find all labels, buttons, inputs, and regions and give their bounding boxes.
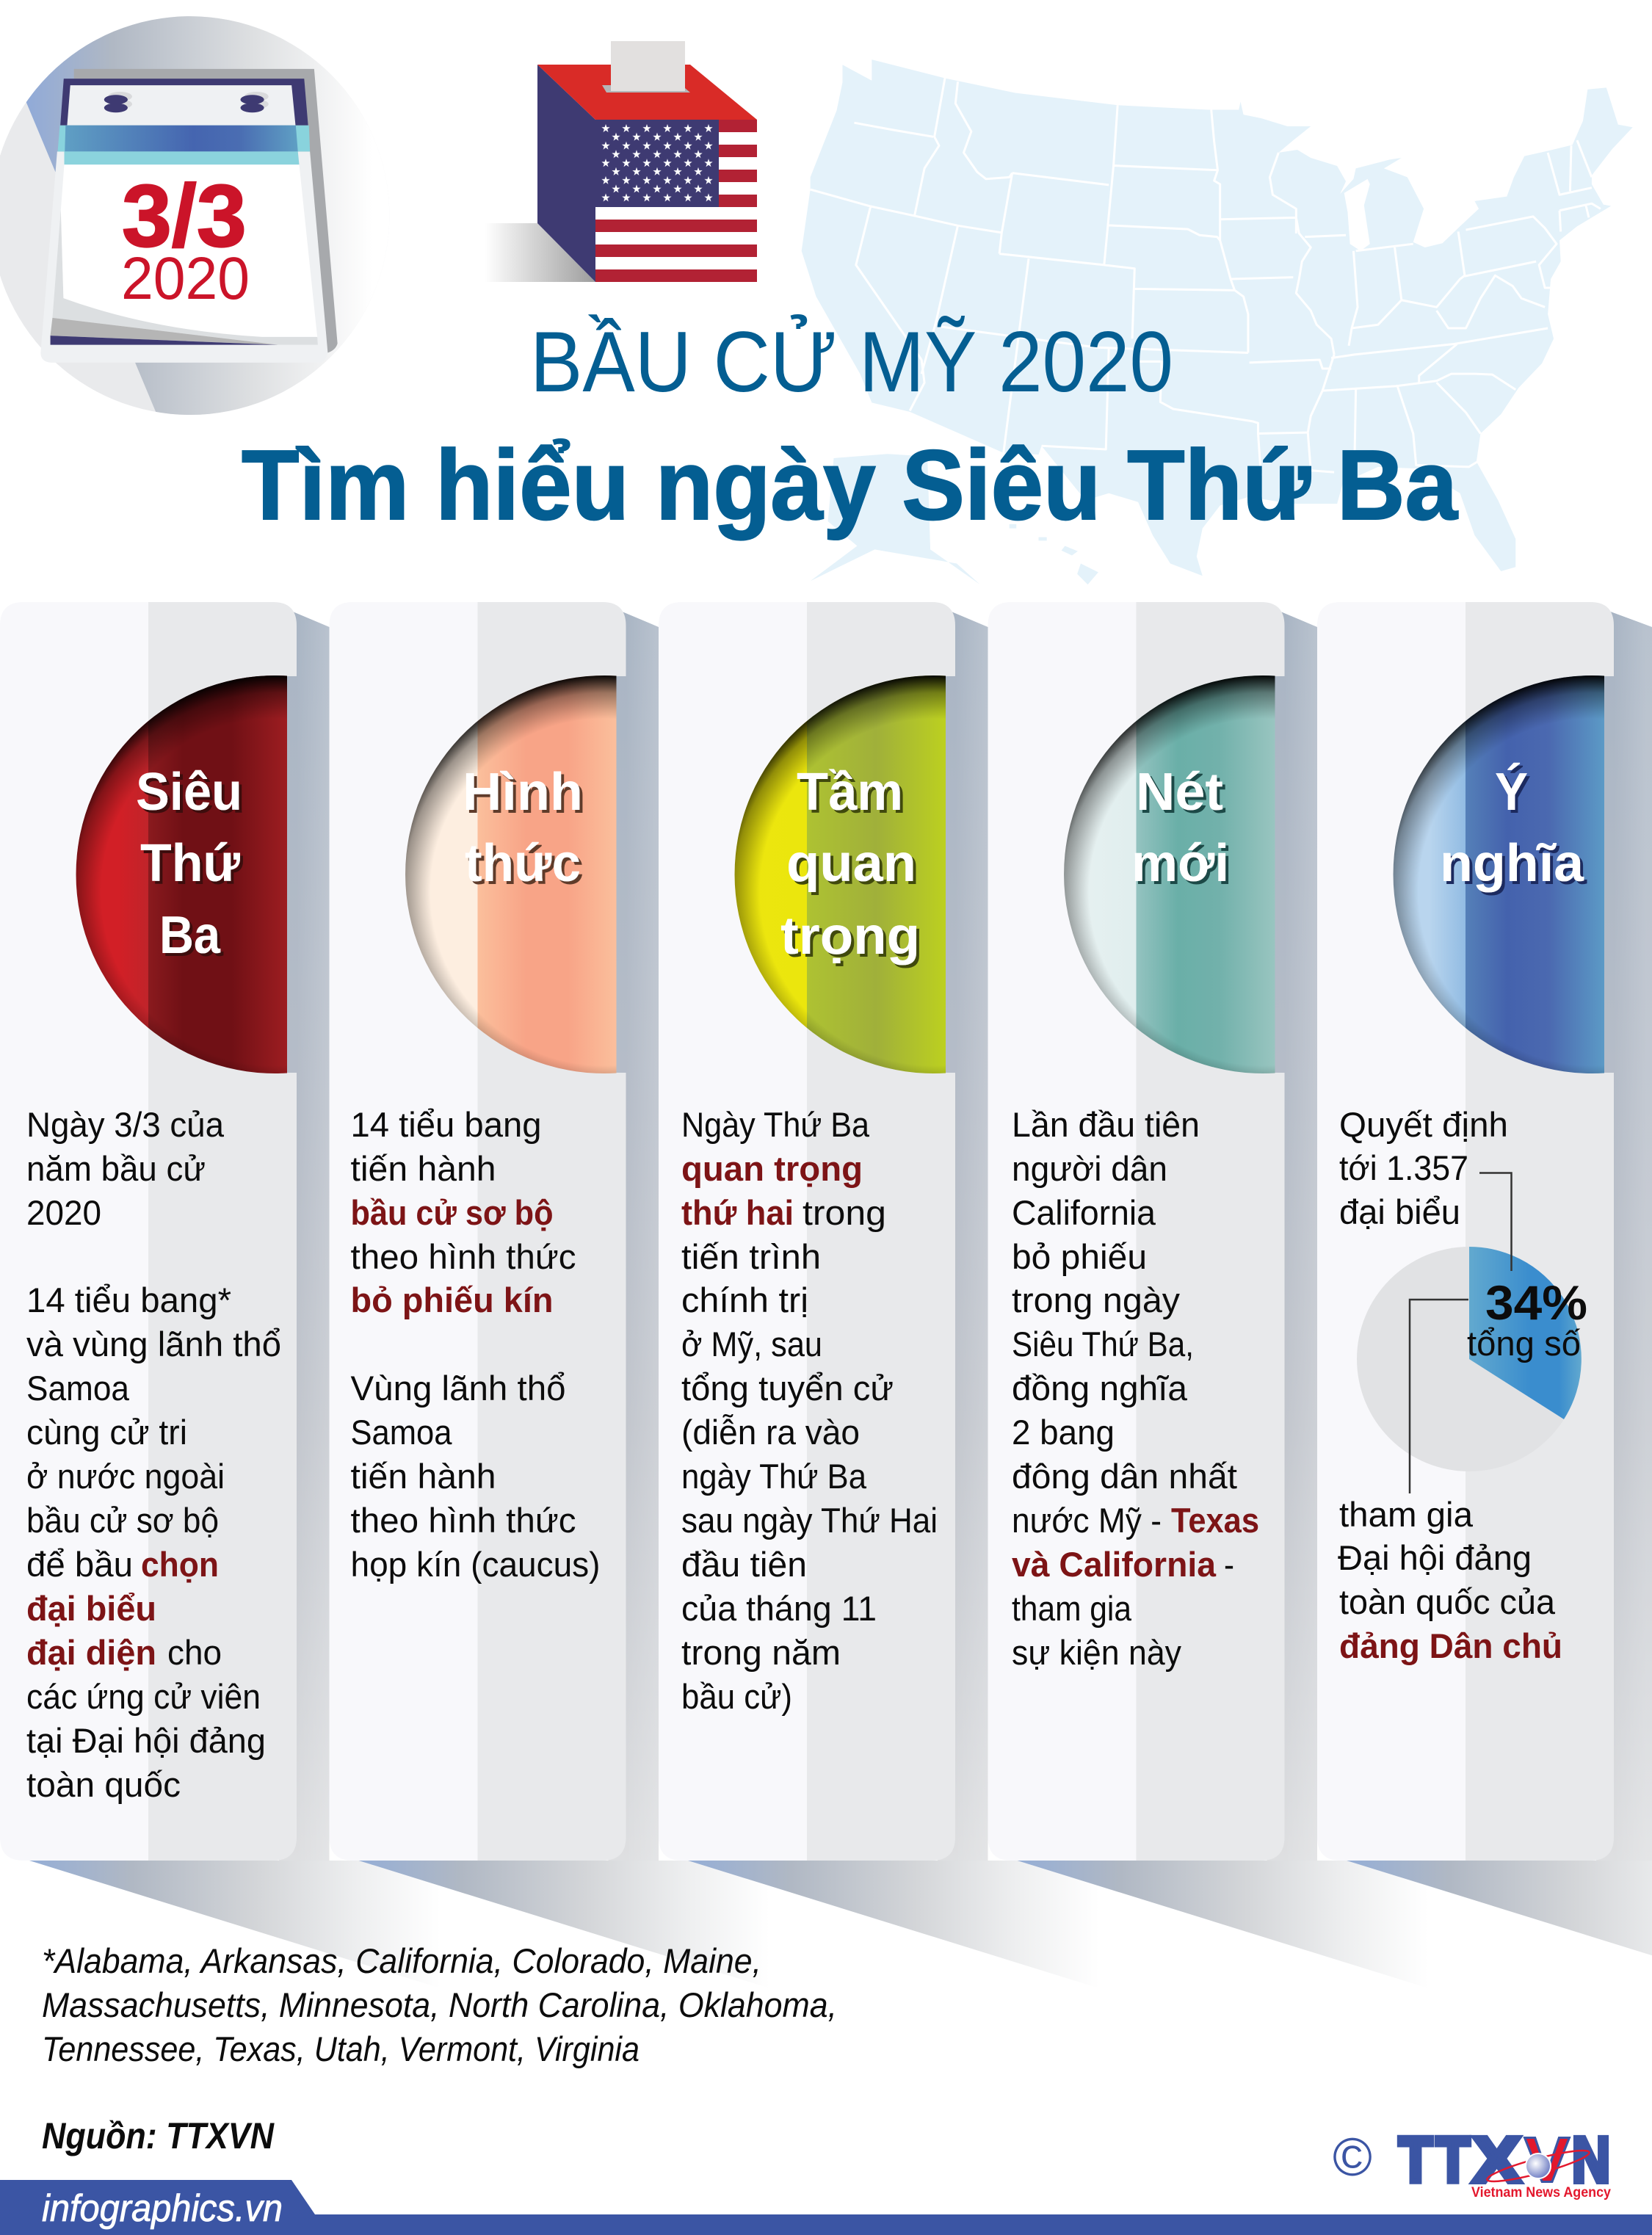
pie chart: 34%: 34% [1485, 1275, 1587, 1330]
text: Ý nghĩa: tới 1.357 [1339, 1148, 1468, 1187]
text: Tầm quan trọng: quan trọng [681, 1149, 863, 1188]
text: Siêu Thứ Ba: toàn quốc [26, 1765, 181, 1804]
text: Hình thức: tiến hành [351, 1457, 496, 1496]
text: Siêu Thứ Ba: Samoa [26, 1369, 130, 1408]
text: Hình thức: tiến hành [351, 1149, 496, 1188]
text: Nét mới: người dân [1012, 1149, 1167, 1188]
text: Tầm quan trọng: trong [803, 1193, 886, 1232]
heading: Siêu Thứ Ba [136, 763, 242, 965]
heading: Nét mới [1131, 763, 1229, 893]
text: Tầm quan trọng: tổng tuyển cử [681, 1369, 894, 1408]
icon: calendar in circle: 2020 [121, 245, 250, 312]
text: Nét mới: Lần đầu tiên [1012, 1105, 1200, 1144]
text: Tầm quan trọng: ngày Thứ Ba [681, 1457, 867, 1496]
text: Nét mới: Siêu Thứ Ba, [1012, 1325, 1194, 1363]
footnote: list of states [42, 1941, 837, 2068]
logo: TTXVN: V [1524, 2125, 1570, 2195]
text: Siêu Thứ Ba: 14 tiểu bang* [26, 1280, 231, 1319]
footer bar: infographics.vn [42, 2187, 283, 2230]
text: Hình thức: họp kín (caucus) [351, 1545, 601, 1584]
panel: Nét mới [988, 602, 1317, 1861]
logo: TTXVN: Vietnam News Agency [1471, 2185, 1611, 2200]
text: Hình thức: Vùng lãnh thổ [351, 1369, 565, 1408]
heading: Hình thức: thức [465, 834, 581, 893]
heading: Tầm quan trọng: trọng [780, 907, 920, 966]
text: Tầm quan trọng: (diễn ra vào [681, 1413, 860, 1452]
text: Ý nghĩa: đại biểu [1339, 1192, 1460, 1231]
text: Nét mới: Texas [1171, 1501, 1259, 1540]
pie chart: 34% [1357, 1173, 1587, 1493]
text: Siêu Thứ Ba: ở nước ngoài [26, 1457, 225, 1496]
text: Nét mới: - [1224, 1545, 1234, 1584]
pie chart: 34%: tổng số [1467, 1324, 1581, 1363]
text: Siêu Thứ Ba: cho [167, 1633, 222, 1672]
text: Siêu Thứ Ba: đại diện [26, 1633, 156, 1672]
bottom card shadows [29, 1861, 1652, 2011]
text: Tầm quan trọng: đầu tiên [681, 1545, 807, 1584]
logo: TTXVN: X [1473, 2125, 1521, 2195]
text: Tầm quan trọng: trong năm [681, 1633, 841, 1672]
heading: Tầm quan trọng: Tầm [797, 763, 903, 822]
logo: TTXVN: T [1399, 2125, 1432, 2195]
footnote: list of states: Tennessee, Texas, Utah, Vermont, Virginia [42, 2029, 640, 2068]
text: Siêu Thứ Ba: cùng cử tri [26, 1413, 187, 1452]
text: Ý nghĩa: tham gia [1339, 1495, 1474, 1534]
text: Ý nghĩa: đảng Dân chủ [1339, 1626, 1562, 1665]
text: Ý nghĩa [1338, 1105, 1562, 1665]
text: Nét mới: tham gia [1012, 1589, 1132, 1628]
icon: calendar in circle [0, 16, 354, 415]
title: Tìm hiểu ngày Siêu Thứ Ba [242, 430, 1458, 540]
circle: Ý nghĩa [1394, 675, 1604, 1073]
text: Tầm quan trọng: thứ hai [681, 1193, 794, 1232]
footnote: list of states: Massachusetts, Minnesota, North Carolina, Oklahoma, [42, 1985, 837, 2024]
logo: TTXVN [1399, 2125, 1611, 2200]
heading: Nét mới: Nét [1136, 763, 1223, 822]
heading: Siêu Thứ Ba: Ba [159, 906, 221, 965]
text: Siêu Thứ Ba: và vùng lãnh thổ [26, 1325, 281, 1363]
icon: ballot box with US flag [485, 41, 757, 282]
heading: Ý nghĩa: Ý [1495, 762, 1528, 822]
logo: TTXVN: T [1436, 2125, 1470, 2195]
footer bar [0, 2180, 1652, 2235]
text: Hình thức: 14 tiểu bang [351, 1105, 542, 1144]
text: Hình thức: theo hình thức [351, 1237, 576, 1276]
text: Siêu Thứ Ba: chọn [141, 1545, 219, 1584]
heading: Tầm quan trọng [780, 763, 920, 966]
title [242, 314, 1458, 540]
circle: Siêu Thứ Ba [76, 675, 287, 1073]
text: Siêu Thứ Ba: tại Đại hội đảng [26, 1721, 266, 1760]
heading: Ý nghĩa [1440, 762, 1584, 893]
text: Nét mới: nước Mỹ - [1012, 1501, 1162, 1540]
heading: Nét mới: mới [1131, 834, 1229, 893]
text: Nét mới: bỏ phiếu [1012, 1237, 1147, 1276]
panel: Ý nghĩa [1394, 602, 1652, 1861]
text: Siêu Thứ Ba: đại biểu [26, 1589, 156, 1628]
text: Hình thức: bỏ phiếu kín [351, 1280, 554, 1319]
panel: Siêu Thứ Ba [0, 602, 329, 1861]
heading: Ý nghĩa: nghĩa [1440, 834, 1584, 893]
text: Nét mới: đồng nghĩa [1012, 1369, 1188, 1408]
text: Tầm quan trọng: của tháng 11 [681, 1589, 877, 1628]
text: Hình thức [351, 1105, 601, 1584]
circle: Hình thức [405, 675, 617, 1073]
text: Tầm quan trọng: ở Mỹ, sau [681, 1325, 822, 1363]
heading: Tầm quan trọng: quan [786, 834, 916, 893]
circle: Tầm quan trọng [735, 675, 946, 1073]
text: Nét mới: 2 bang [1012, 1413, 1115, 1452]
text: Siêu Thứ Ba: để bầu [26, 1545, 133, 1584]
logo: TTXVN: N [1572, 2125, 1610, 2195]
text: Tầm quan trọng: Ngày Thứ Ba [681, 1105, 870, 1144]
circle: Nét mới [1064, 675, 1275, 1073]
text: Tầm quan trọng: sau ngày Thứ Hai [681, 1501, 938, 1540]
text: Hình thức: Samoa [351, 1413, 452, 1452]
text: Tầm quan trọng: chính trị [681, 1280, 808, 1319]
text: Tầm quan trọng: tiến trình [681, 1237, 821, 1276]
text: Siêu Thứ Ba: năm bầu cử [26, 1149, 206, 1188]
source: Nguồn: TTXVN [42, 2115, 275, 2156]
text: Nét mới: trong ngày [1012, 1280, 1181, 1319]
copyright symbol: © [1333, 2128, 1372, 2187]
text: Siêu Thứ Ba: 2020 [26, 1193, 101, 1232]
text: Hình thức: bầu cử sơ bộ [351, 1193, 554, 1232]
text: Siêu Thứ Ba: Ngày 3/3 của [26, 1105, 225, 1144]
US map background [802, 59, 1633, 584]
text: Ý nghĩa: Đại hội đảng [1338, 1538, 1532, 1577]
text: Siêu Thứ Ba: bầu cử sơ bộ [26, 1501, 219, 1540]
icon: calendar in circle: 3/3 [122, 167, 247, 265]
title: BẦU CỬ MỸ 2020 [530, 314, 1173, 410]
panel: Tầm quan trọng [659, 602, 988, 1861]
panel: Hình thức [329, 602, 659, 1861]
text: Nét mới: California [1012, 1193, 1156, 1232]
heading: Hình thức [463, 763, 583, 893]
text: Ý nghĩa: Quyết định [1339, 1105, 1508, 1144]
heading: Siêu Thứ Ba: Siêu [136, 763, 242, 822]
text: Ý nghĩa: toàn quốc của [1339, 1582, 1556, 1621]
heading: Hình thức: Hình [463, 763, 583, 822]
text: Hình thức: theo hình thức [351, 1501, 576, 1540]
text: Nét mới: và California [1012, 1545, 1217, 1584]
text: Siêu Thứ Ba [26, 1105, 281, 1804]
text: Siêu Thứ Ba: các ứng cử viên [26, 1677, 261, 1716]
text: Nét mới: sự kiện này [1012, 1633, 1181, 1672]
text: Tầm quan trọng: bầu cử) [681, 1677, 792, 1716]
heading: Siêu Thứ Ba: Thứ [140, 834, 241, 893]
text: Nét mới: đông dân nhất [1012, 1457, 1237, 1496]
text: Nét mới [1012, 1105, 1259, 1672]
footnote: list of states: *Alabama, Arkansas, California, Colorado, Maine, [42, 1941, 761, 1980]
text: Tầm quan trọng [681, 1105, 938, 1716]
